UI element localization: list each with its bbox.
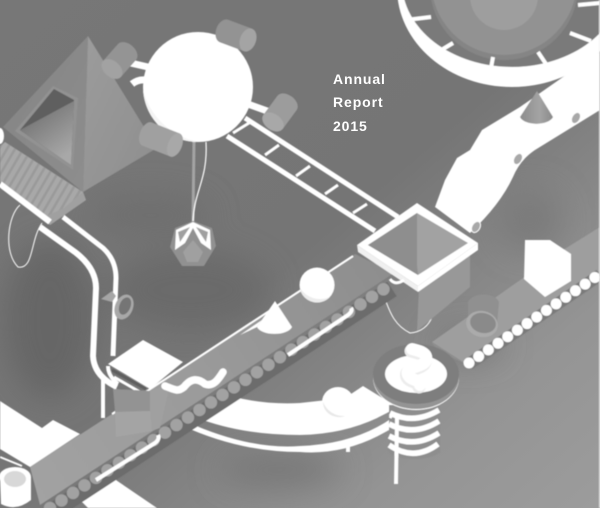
white arc conveyor <box>183 386 397 452</box>
title text <box>333 71 386 134</box>
cup <box>0 457 31 507</box>
wave on conveyor <box>165 372 223 390</box>
right edge strip <box>599 0 600 508</box>
title text: Annual <box>333 71 386 87</box>
ladder track <box>227 118 398 231</box>
cylinder: right <box>259 89 301 136</box>
cylinder: bottom <box>136 120 186 159</box>
icon: cone on conveyor <box>520 91 553 124</box>
title text: 2015 <box>333 118 368 134</box>
right white conveyor <box>435 52 600 234</box>
swirl <box>406 349 426 387</box>
spring <box>388 405 440 459</box>
looping wires <box>9 205 434 333</box>
small rollers <box>470 111 582 234</box>
white sub-conveyor <box>108 340 183 392</box>
soft floor shadows <box>4 190 560 484</box>
cylinder: left <box>98 38 141 83</box>
bottom left white block <box>0 401 80 467</box>
circular platform <box>397 0 600 87</box>
hexagon block <box>524 240 571 297</box>
central hopper <box>357 203 478 331</box>
cone on main conveyor <box>240 301 292 335</box>
sphere on main conveyor <box>300 268 334 303</box>
pyramid <box>3 36 157 192</box>
cylinder: top <box>212 17 260 54</box>
funnel fitting <box>101 291 137 322</box>
right lower conveyor <box>432 227 600 364</box>
tube <box>464 294 500 340</box>
sphere with arms <box>98 17 301 159</box>
ribbed feed conveyor <box>0 128 86 225</box>
bottom white slab <box>77 476 157 508</box>
spinner platform <box>373 344 459 484</box>
hanging rod <box>193 140 206 222</box>
hanging polyhedron <box>170 221 216 266</box>
box on conveyor <box>113 384 170 437</box>
main conveyor <box>30 254 394 508</box>
blob on arc <box>322 387 354 417</box>
rail: lower guide <box>96 435 159 480</box>
window <box>15 86 78 170</box>
title text: Report <box>333 94 384 110</box>
feed pipes <box>40 217 117 418</box>
